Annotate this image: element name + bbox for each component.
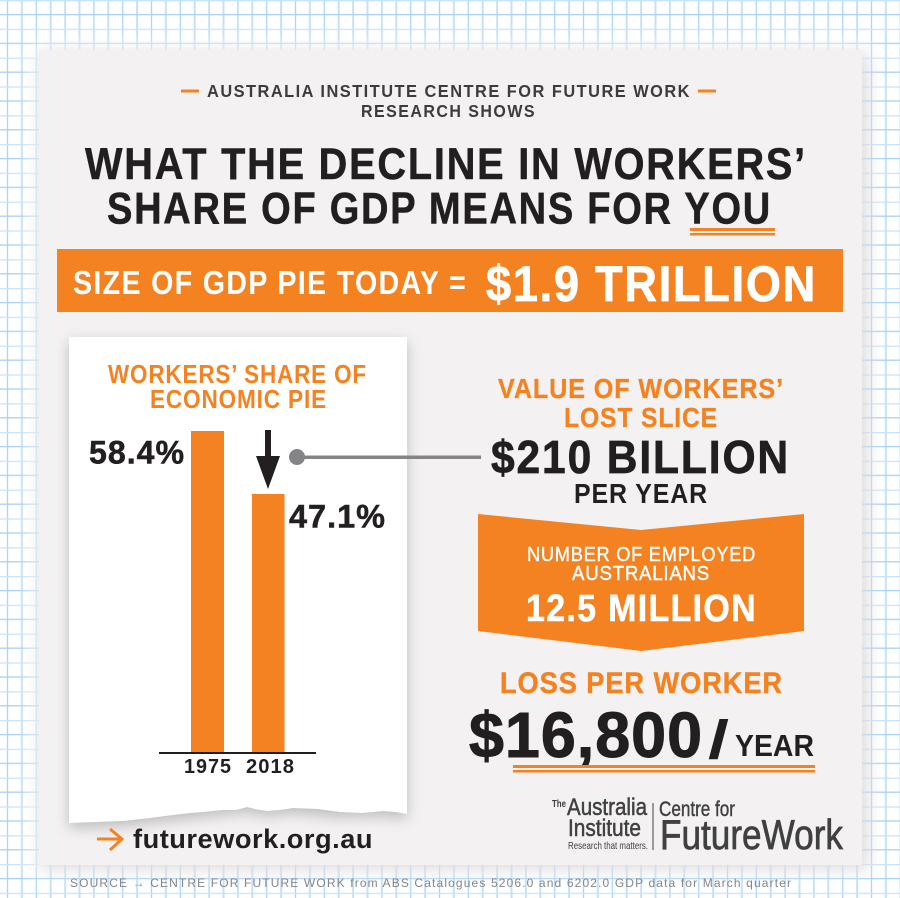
logo: Institute <box>568 815 641 842</box>
text block: value of lost slice: LOST SLICE <box>564 402 718 433</box>
chevron panel: employed Australians: 12.5 MILLION <box>526 588 757 630</box>
text block: value of lost slice: VALUE OF WORKERS’ <box>498 373 784 404</box>
axis labels: 1975 <box>184 756 232 778</box>
source note: SOURCE → CENTRE FOR FUTURE WORK from ABS Catalogues 5206.0 and 6202.0 GDP data for March quarter <box>70 876 791 890</box>
logo <box>552 794 844 858</box>
bar: 1975 <box>191 431 224 752</box>
logo: Australia <box>567 794 648 821</box>
banner: size of GDP pie: SIZE OF GDP PIE TODAY = <box>73 264 467 301</box>
chevron panel: employed Australians <box>478 514 804 651</box>
text block: value of lost slice <box>491 373 790 509</box>
chart heading <box>108 359 367 414</box>
chart heading: ECONOMIC PIE <box>150 384 327 414</box>
banner: size of GDP pie <box>57 249 843 312</box>
title <box>85 140 807 236</box>
chevron panel: employed Australians: AUSTRALIANS <box>572 563 710 585</box>
text block: loss per worker: LOSS PER WORKER <box>500 667 783 700</box>
logo: FutureWork <box>660 811 844 858</box>
chevron panel: employed Australians: NUMBER OF EMPLOYED <box>527 544 756 566</box>
title: WHAT THE DECLINE IN WORKERS’ <box>85 140 807 189</box>
header label <box>181 81 716 121</box>
website link: futurework.org.au <box>133 824 373 854</box>
bar: 2018 <box>252 494 284 752</box>
text block: loss per worker: / <box>708 710 729 770</box>
banner: size of GDP pie: $1.9 TRILLION <box>486 256 817 312</box>
header label: AUSTRALIA INSTITUTE CENTRE FOR FUTURE WORK <box>207 81 691 101</box>
text block: loss per worker: YEAR <box>735 729 814 763</box>
panel: torn paper bar chart <box>69 337 407 823</box>
logo: Centre for <box>659 798 735 821</box>
text block: value of lost slice: PER YEAR <box>574 478 708 509</box>
chart heading: WORKERS’ SHARE OF <box>108 359 367 389</box>
title: SHARE OF GDP MEANS FOR YOU <box>107 184 772 234</box>
text block: value of lost slice: $210 BILLION <box>491 431 790 483</box>
value: 47.1%: 47.1% <box>289 498 386 534</box>
logo: Research that matters. <box>568 841 648 852</box>
axis labels: 2018 <box>246 756 295 778</box>
header label: RESEARCH SHOWS <box>361 101 536 121</box>
chart axis <box>159 752 316 754</box>
value: 58.4%: 58.4% <box>89 434 185 470</box>
text block: loss per worker: $16,800 <box>469 699 703 771</box>
arrow: decline <box>256 430 280 489</box>
logo: The <box>552 799 566 810</box>
connector line <box>289 449 481 465</box>
text block: loss per worker <box>469 667 815 772</box>
axis labels <box>184 756 295 778</box>
